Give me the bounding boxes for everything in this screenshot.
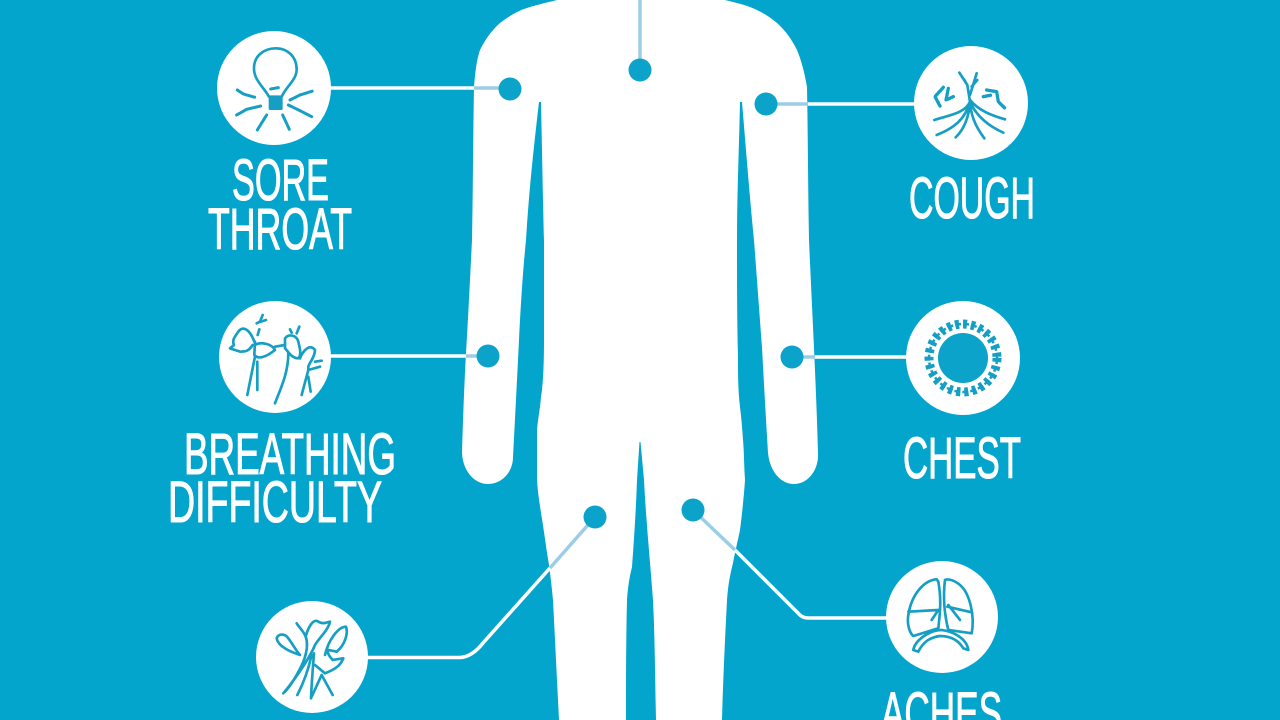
connector: lower left (368, 517, 595, 658)
label: sore throat (208, 148, 352, 262)
icon circle: chest (906, 301, 1020, 415)
dot: sore throat (498, 78, 522, 100)
label: breathing difficulty: DIFFICULTY (168, 470, 382, 535)
dot: top centre (628, 58, 652, 82)
icon: virus ring (929, 324, 997, 392)
icon circle: breathing difficulty (219, 301, 331, 413)
callout: aches (682, 498, 1002, 720)
label: breathing difficulty: BREATHING (184, 422, 396, 487)
icon circle: cough (914, 46, 1028, 160)
icon: light bulb throat (237, 48, 313, 130)
callout: sore throat (208, 31, 522, 262)
dot: aches (682, 498, 704, 522)
icon circle: lower left (256, 601, 368, 713)
label: cough: COUGH (909, 166, 1035, 231)
connector: aches (693, 510, 886, 618)
label: chest: CHEST (903, 426, 1021, 491)
callout: cough (754, 46, 1035, 231)
connector: sore throat (331, 86, 510, 90)
connector: top centre (638, 0, 642, 70)
dot: chest (780, 346, 804, 368)
connector: chest (792, 355, 906, 359)
label: sore throat: THROAT (208, 197, 352, 262)
icon: bronchial roots (934, 73, 1005, 138)
label: sore throat: SORE (232, 148, 329, 213)
callout: lower left (256, 506, 606, 713)
label: breathing difficulty (168, 422, 396, 535)
dot: cough (754, 92, 778, 116)
connector: breathing difficulty (332, 354, 488, 358)
icon circle: aches (886, 561, 998, 673)
callout: breathing difficulty (168, 301, 500, 535)
icon: flower and leaves (277, 621, 347, 698)
icon circle: sore throat (217, 31, 331, 145)
icon: branching plants (230, 315, 322, 403)
connector: cough (766, 102, 914, 106)
dot: breathing difficulty (476, 344, 500, 368)
dot: lower left (584, 506, 606, 528)
human body silhouette (462, 0, 818, 720)
icon: lungs (908, 579, 973, 652)
callout: chest (780, 301, 1021, 491)
